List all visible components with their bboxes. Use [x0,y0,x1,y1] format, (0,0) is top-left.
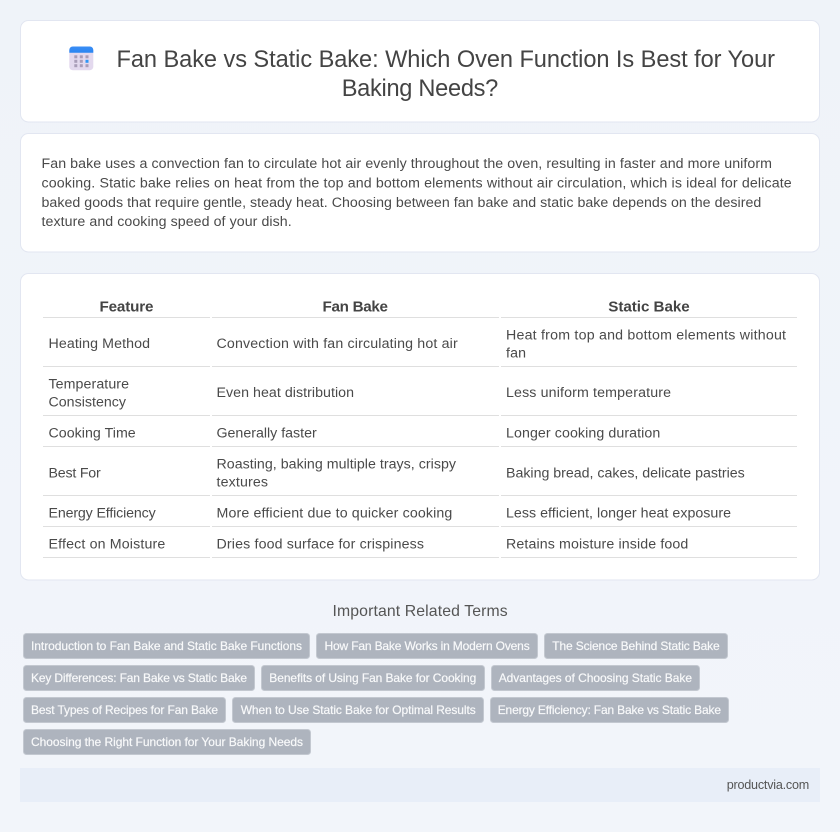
table row: cooking time [43,425,797,447]
text block: intro paragraph: texture and cooking speed of your dish. [42,214,292,230]
table row: best for: Roasting, baking multiple trays, crispy [216,456,457,472]
tag [24,634,310,658]
tag [492,666,700,690]
tag [232,698,484,722]
table row: heating method: fan [506,345,526,361]
footer source text: productvia.com [727,778,809,792]
table row: best for: textures [216,474,268,490]
table row: heating method [43,327,797,367]
table row: heating method: Heating Method [48,336,150,352]
title: Baking Needs? [342,76,498,102]
table row: heating method: Heat from top and bottom elements without [506,327,786,343]
tag: Best Types of Recipes for Fan Bake [31,703,218,717]
icon: calendar [69,46,93,70]
table row: energy efficiency [43,505,797,527]
tag [24,730,310,754]
table row: cooking time: Longer cooking duration [506,425,660,441]
table row: temperature consistency: Consistency [48,394,127,410]
tag: When to Use Static Bake for Optimal Results [241,703,476,717]
panel: title header [20,20,820,122]
tag: Benefits of Using Fan Bake for Cooking [269,671,476,685]
table row: effect on moisture [43,536,797,558]
table row: best for: Best For [48,465,101,481]
tag [24,666,254,690]
tag: Energy Efficiency: Fan Bake vs Static Bake [498,703,721,717]
table header row: Static Bake [608,298,690,315]
text block: intro paragraph: Fan bake uses a convection fan to circulate hot air evenly throughout the oven, resulting in faster and more uniform [42,156,772,172]
heading: important related terms: Important Related Terms [332,603,508,620]
table row: energy efficiency: Energy Efficiency [48,505,157,521]
panel: comparison table [20,274,820,580]
table row: temperature consistency: Temperature [48,376,129,392]
table row: energy efficiency: Less efficient, longer heat exposure [506,505,731,521]
table row: cooking time: Cooking Time [48,425,136,441]
tag: How Fan Bake Works in Modern Ovens [324,639,530,653]
title: Fan Bake vs Static Bake: Which Oven Function Is Best for Your [116,47,775,73]
table row: cooking time: Generally faster [216,425,317,441]
tag: The Science Behind Static Bake [552,639,720,653]
table header row [43,298,797,318]
table row: best for [43,456,797,496]
tag [544,634,728,658]
tag [24,698,226,722]
table row: temperature consistency [43,376,797,416]
table row: best for: Baking bread, cakes, delicate pastries [506,465,745,481]
tag [316,634,538,658]
footer bar [20,768,820,802]
table row: temperature consistency: Less uniform temperature [506,385,671,401]
tag: Key Differences: Fan Bake vs Static Bake [31,671,247,685]
table row: effect on moisture: Effect on Moisture [48,536,165,552]
tag: Advantages of Choosing Static Bake [499,671,692,685]
text block: intro paragraph: baked goods that require gentle, steady heat. Choosing between fan bake and static bake depends on the desired [42,195,761,211]
tag: Choosing the Right Function for Your Baking Needs [31,735,303,749]
tag [262,666,484,690]
table row: effect on moisture: Retains moisture inside food [506,536,688,552]
tag [490,698,728,722]
panel: introduction text [20,134,820,252]
table row: heating method: Convection with fan circulating hot air [216,336,458,352]
title [116,47,775,102]
text block: intro paragraph: cooking. Static bake relies on heat from the top and bottom elements without air circulation, which is ideal for delicate [42,175,792,191]
tag: Introduction to Fan Bake and Static Bake Functions [31,639,302,653]
table row: temperature consistency: Even heat distribution [216,385,354,401]
table row: energy efficiency: More efficient due to quicker cooking [216,505,452,521]
table header row: Feature [100,298,154,315]
text block: intro paragraph [42,156,792,230]
tag group: related terms [24,634,728,754]
table row: effect on moisture: Dries food surface for crispiness [216,536,424,552]
table header row: Fan Bake [322,298,388,315]
